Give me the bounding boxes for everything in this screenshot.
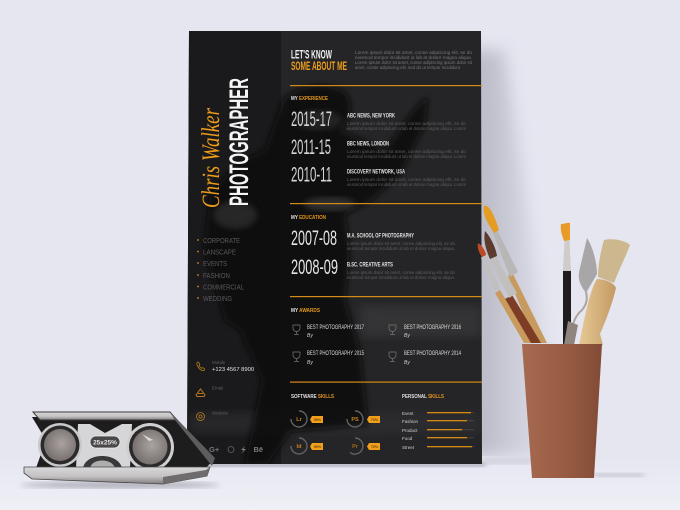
entry 2007-08	[291, 227, 455, 251]
entry 2008-09: 2008-09	[291, 256, 338, 279]
contact website: Website	[212, 410, 229, 416]
awards grid	[293, 324, 461, 366]
poster sheet	[187, 31, 482, 464]
entry 2011-15: BBC NEWS, LONDON	[347, 140, 389, 148]
sidebar panel	[187, 31, 281, 464]
brush dark	[484, 231, 541, 343]
award 2017	[293, 324, 364, 339]
divider	[290, 203, 482, 204]
magnification badge	[90, 436, 120, 448]
gauge Id: Id	[297, 444, 301, 450]
entry 2015-17	[291, 108, 466, 131]
palette knife	[564, 238, 597, 345]
entry 2007-08: eiusmod tempor incididunt ut lab et dolore magna aliqua.	[347, 246, 455, 251]
left lens	[38, 423, 82, 467]
bar Food: Food	[402, 436, 413, 441]
sidebar genre list: EVENTS	[203, 261, 227, 268]
entry 2010-11: eiusmod tempor incididunt ut lab et dolore magna aliqua. Lorem	[347, 182, 466, 187]
gauge Lr: 90%	[314, 418, 322, 422]
gauge Pr: Pr	[352, 444, 359, 450]
social icons	[209, 445, 263, 454]
icon: email	[196, 389, 205, 396]
sidebar genre list: LANSCAPE	[203, 250, 236, 256]
experience entries	[291, 108, 466, 187]
heading: about: LET'S KNOW	[291, 50, 332, 62]
entry 2015-17: ABC NEWS, NEW YORK	[347, 112, 395, 120]
brush red tip	[478, 243, 531, 343]
about text	[355, 50, 473, 70]
education entries	[291, 227, 455, 280]
icon: brush pot	[478, 206, 630, 478]
dark body	[32, 417, 214, 468]
gauge Ps: PS	[351, 417, 359, 423]
center bridge	[76, 424, 132, 468]
about text: eiusmod tempor incididunt ut lab et dolore magna aliqua.	[355, 55, 472, 60]
icon: flat round brushes	[478, 206, 630, 346]
divider	[290, 382, 482, 383]
gauge Id	[291, 438, 323, 454]
entry 2010-11: Lorem ipsum dolor sit amet, conse adipiscing elit, se do	[347, 177, 466, 182]
entry 2007-08: 2007-08	[291, 227, 337, 250]
gauge Pr	[350, 438, 380, 454]
entry 2008-09: eiusmod tempor incididunt ut lab et dolore magna aliqua.	[347, 275, 455, 280]
name script: Chris Walker	[198, 108, 225, 208]
entry 2007-08: Lorem ipsum dolor sit amet, conse adipiscing elit, se do	[347, 241, 455, 246]
right lens	[126, 423, 174, 471]
contact details: +123 4567 8900	[212, 367, 254, 373]
entry 2010-11: 2010-11	[291, 164, 332, 186]
section heading: experience: MY EXPERIENCE	[291, 96, 328, 102]
award 2015: BEST PHOTOGRAPHY 2015	[307, 350, 364, 357]
gauge Lr	[291, 411, 323, 427]
award 2016: BEST PHOTOGRAPHY 2016	[404, 324, 461, 331]
award 2016: By	[404, 333, 410, 339]
gauge Id: 90%	[314, 445, 322, 449]
icon: phone	[197, 362, 205, 371]
photographer silhouette photo	[189, 85, 482, 464]
award 2015: By	[307, 360, 313, 366]
icon: website	[196, 412, 204, 420]
bar Street: Street	[402, 445, 415, 450]
entry 2008-09: B.SC. CREATIVE ARTS	[347, 262, 393, 268]
sidebar genre list: CORPORATE	[203, 238, 240, 245]
heading: about: SOME ABOUT ME	[291, 61, 347, 73]
sidebar genre list: WEDDING	[203, 296, 232, 303]
award 2017: By	[307, 333, 313, 339]
contact details	[196, 360, 254, 420]
entry 2010-11: DISCOVERY NETWORK, USA	[347, 168, 405, 176]
award 2014: By	[404, 360, 410, 366]
gauge Ps	[347, 411, 380, 427]
bar Fashion: Fashion	[402, 419, 419, 424]
contact email: Email	[212, 386, 223, 390]
award 2014	[389, 350, 461, 366]
sidebar genre list	[197, 238, 244, 303]
about text: Lorem ipsum dolor sit amet, conse adipiscing elit, se do	[355, 50, 472, 55]
icon: opera binoculars	[20, 412, 220, 488]
base plate	[24, 467, 210, 484]
entry 2008-09: Lorem ipsum dolor sit amet, conse adipiscing elit, se do	[347, 270, 455, 275]
social icons: G+	[209, 445, 220, 454]
about text: Lorem ipsum dolor sit amet, conse adipiscing ipsum dolor sit	[355, 60, 473, 65]
gauge Ps: 70%	[371, 418, 379, 422]
contact mobile: Mobile	[212, 360, 226, 365]
entry 2011-15: 2011-15	[291, 136, 331, 159]
brush orange tip long	[484, 206, 547, 343]
magnification badge: 25x25%	[93, 440, 117, 446]
entry 2015-17: 2015-17	[291, 108, 332, 131]
bar Product: Product	[402, 428, 418, 433]
personal skills bars	[402, 411, 474, 450]
award 2015	[293, 350, 364, 366]
focus wheel	[83, 456, 122, 468]
software skills gauges	[291, 411, 380, 454]
social icons: Bē	[254, 445, 263, 454]
gauge Pr: 70%	[371, 445, 379, 449]
entry 2011-15: Lorem ipsum dolor sit amet, conse adipiscing elit, se do	[347, 149, 466, 154]
gauge Lr: Lr	[296, 417, 303, 423]
section heading: education: MY EDUCATION	[291, 215, 326, 221]
divider	[290, 85, 482, 86]
entry 2007-08: M.A. SCHOOL OF PHOTOGRAPHY	[347, 232, 414, 240]
entry 2015-17: eiusmod tempor incididunt ut lab et dolore magna aliqua. Lorem	[347, 126, 466, 131]
sidebar genre list: FASHION	[203, 273, 230, 280]
pot body	[522, 344, 602, 478]
top plate	[33, 412, 177, 420]
divider	[290, 296, 482, 297]
thin black brush	[561, 223, 571, 346]
entry 2010-11	[291, 164, 466, 187]
heading: about	[291, 50, 347, 73]
section heading: personal skills: PERSONAL SKILLS	[402, 394, 444, 400]
award 2016	[389, 324, 461, 339]
wide bristle brush	[579, 239, 630, 345]
sidebar genre list: COMMERCIAL	[203, 284, 244, 292]
entry 2008-09	[291, 256, 455, 280]
award 2017: BEST PHOTOGRAPHY 2017	[307, 324, 364, 331]
entry 2011-15	[291, 136, 466, 159]
resume poster	[187, 31, 482, 464]
sidebar title: name and role	[198, 78, 254, 208]
section heading: software skills: SOFTWARE SKILLS	[291, 394, 334, 400]
award 2014: BEST PHOTOGRAPHY 2014	[404, 350, 461, 357]
bar Event: Event	[402, 411, 414, 416]
entry 2011-15: eiusmod tempor incididunt ut lab et dolore magna aliqua. Lorem	[347, 154, 466, 159]
about text: amet, conse adipiscing elit, sed do ut tempor incididunt	[355, 65, 461, 70]
entry 2015-17: Lorem ipsum dolor sit amet, conse adipiscing elit, se do	[347, 121, 466, 126]
section heading: awards: MY AWARDS	[291, 308, 320, 314]
list bullets	[197, 239, 199, 299]
